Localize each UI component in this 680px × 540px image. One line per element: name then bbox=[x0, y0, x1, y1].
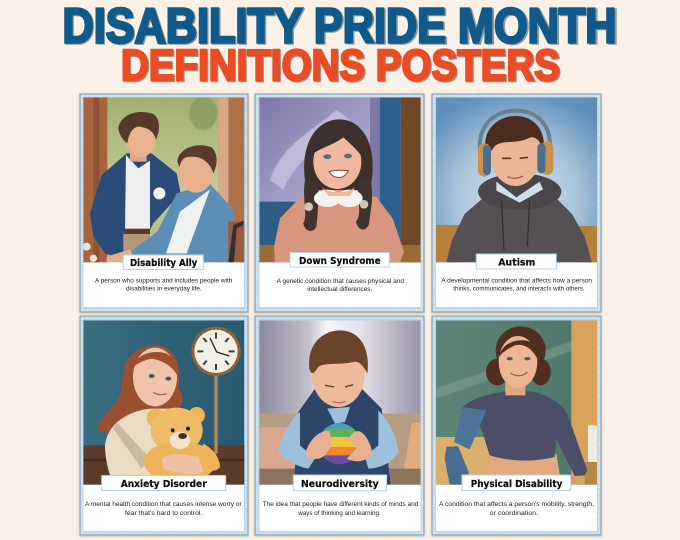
label: Disability Ally bbox=[123, 255, 203, 270]
definition text: intellectual differences. bbox=[307, 286, 373, 293]
definition text: The idea that people have different kinds of minds and bbox=[263, 501, 419, 508]
heading: Disability Pride Month: DISABILITY PRIDE MONTH bbox=[64, 0, 618, 54]
panel: Physical Disability poster bbox=[432, 316, 601, 535]
panel: Down Syndrome poster bbox=[255, 94, 424, 312]
label: Neurodiversity: Neurodiversity bbox=[301, 479, 379, 490]
label: Physical Disability bbox=[462, 475, 571, 490]
panel: Disability Ally poster bbox=[80, 94, 248, 312]
definition text: A condition that affects a person's mobility, strength, bbox=[439, 501, 594, 508]
definition text: A mental health condition that causes intense worry or bbox=[85, 501, 243, 508]
definition text bbox=[277, 278, 404, 293]
definition text: or coordination. bbox=[490, 510, 538, 517]
definition text: ways of thinking and learning. bbox=[297, 510, 381, 517]
definition text: A person who supports and includes people with bbox=[95, 278, 233, 284]
illustration: girl hugging teddy bear beside a clock bbox=[83, 320, 244, 485]
definition text: thinks, communicates, and interacts with others. bbox=[453, 286, 585, 292]
definition text bbox=[85, 501, 243, 517]
illustration: boy in hoodie with headphones bbox=[436, 97, 597, 262]
label: Autism: Autism bbox=[498, 258, 536, 268]
heading: Disability Pride Month: DISABILITY PRIDE MONTH bbox=[62, 0, 616, 54]
label: Anxiety Disorder: Anxiety Disorder bbox=[121, 479, 207, 490]
illustration: two men, one in a wheelchair bbox=[83, 97, 244, 262]
definition text: A developmental condition that affects how a person bbox=[441, 278, 592, 284]
panel: Autism poster bbox=[432, 94, 601, 312]
definition text: A genetic condition that causes physical and bbox=[277, 278, 404, 285]
label: Disability Ally: Disability Ally bbox=[130, 258, 197, 269]
label: Physical Disability: Physical Disability bbox=[471, 479, 562, 490]
braids bbox=[303, 180, 318, 231]
heading: Definitions Posters: DEFINITIONS POSTERS bbox=[122, 42, 561, 91]
illustration: boy holding rainbow ball bbox=[259, 320, 421, 485]
label: Down Syndrome bbox=[290, 252, 389, 267]
label: Down Syndrome: Down Syndrome bbox=[299, 256, 381, 267]
definition text bbox=[263, 501, 419, 517]
definition text bbox=[441, 278, 592, 292]
definition text: disabilities in everyday life. bbox=[126, 286, 202, 292]
panel: Neurodiversity poster bbox=[255, 316, 424, 535]
illustration: woman with prosthetic arm bbox=[436, 320, 597, 485]
label: Autism bbox=[476, 254, 556, 269]
label: Neurodiversity bbox=[293, 475, 387, 491]
definition text bbox=[439, 501, 594, 517]
panel: Anxiety Disorder poster bbox=[80, 316, 248, 535]
heading: Definitions Posters: DEFINITIONS POSTERS bbox=[121, 41, 560, 90]
definition text bbox=[95, 278, 233, 292]
label: Anxiety Disorder bbox=[102, 476, 226, 490]
illustration: smiling girl with braids bbox=[259, 97, 421, 262]
definition text: fear that's hard to control. bbox=[125, 510, 203, 517]
